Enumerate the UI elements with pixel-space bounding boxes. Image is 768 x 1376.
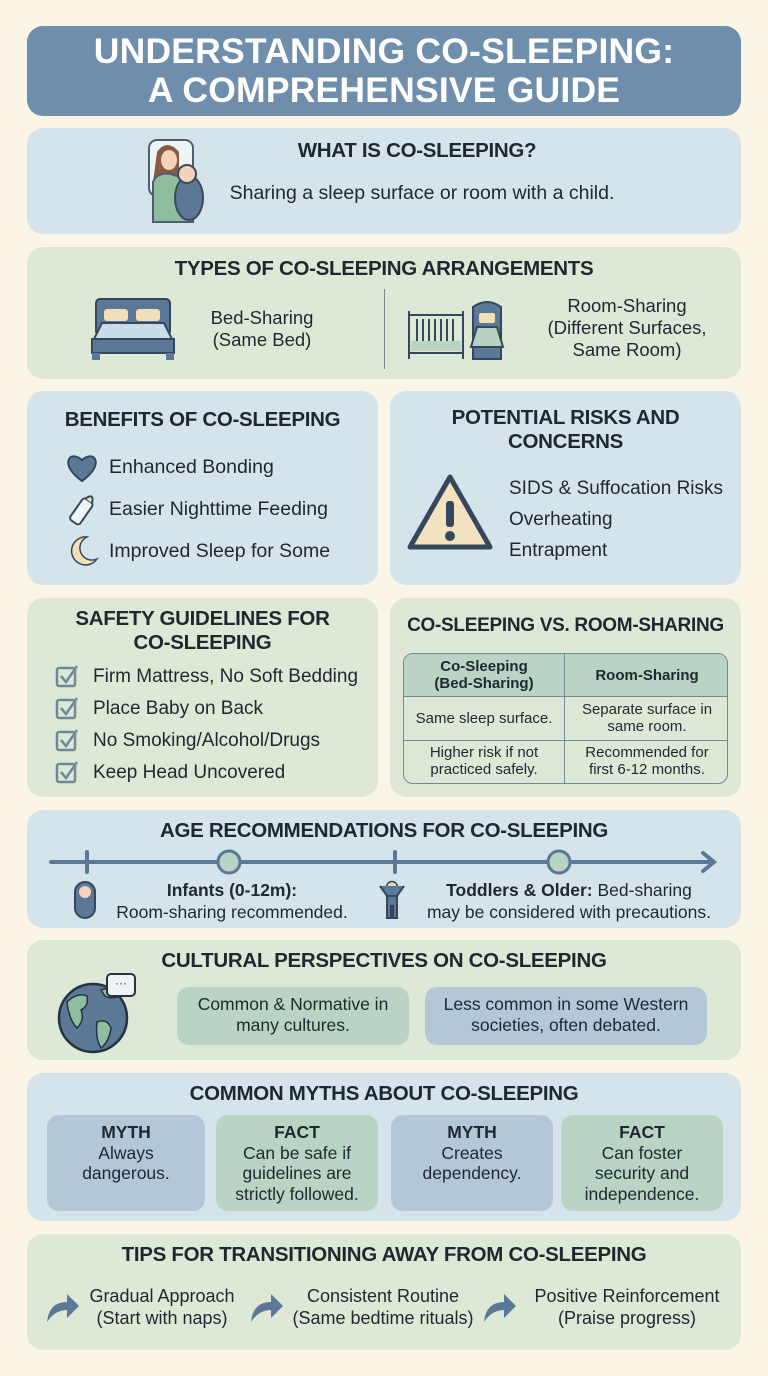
- fact card 1: Can be safe if: [243, 1142, 351, 1162]
- text: Entrapment: [509, 540, 607, 561]
- fact card 2: Can foster: [602, 1142, 682, 1162]
- panel: benefits: [27, 391, 378, 585]
- checklist: No Smoking/Alcohol/Drugs: [93, 730, 320, 751]
- heading: BENEFITS OF CO-SLEEPING: [65, 408, 340, 431]
- fact card 1: [216, 1115, 378, 1211]
- text: bed-sharing: (Same Bed): [213, 329, 311, 350]
- text: toddlers: Toddlers & Older: Bed-sharing: [446, 880, 692, 900]
- arrow icon 1: [47, 1294, 79, 1322]
- tip 3: [534, 1286, 720, 1328]
- text: room-sharing: Room-Sharing: [567, 295, 687, 316]
- table: Higher risk if not: [430, 744, 538, 761]
- text: room-sharing: (Different Surfaces,: [547, 317, 707, 338]
- panel: types: [27, 247, 741, 379]
- text: infants: Infants (0-12m):: [167, 880, 297, 900]
- table: first 6-12 months.: [589, 761, 705, 778]
- table: same room.: [607, 718, 687, 735]
- callout: less common: [425, 987, 707, 1045]
- icon: crib and bed: [408, 301, 504, 360]
- icon: toddler: [379, 880, 405, 919]
- icon: warning: [408, 474, 492, 550]
- heading: CO-SLEEPING VS. ROOM-SHARING: [407, 615, 724, 636]
- tip 3: Positive Reinforcement: [534, 1286, 720, 1306]
- icon: globe with speech bubble: [58, 973, 136, 1054]
- myth card 2: Creates: [441, 1142, 503, 1162]
- panel: safety: [27, 598, 378, 797]
- text: SIDS & Suffocation Risks: [509, 478, 723, 499]
- text: Enhanced Bonding: [109, 456, 274, 478]
- icon: heart: [67, 455, 97, 482]
- title: UNDERSTANDING CO-SLEEPING:: [94, 31, 674, 71]
- text: Sharing a sleep surface or room with a child.: [230, 182, 614, 204]
- tip 2: [292, 1286, 474, 1328]
- heading: CONCERNS: [508, 430, 623, 453]
- fact card 2: [561, 1115, 723, 1211]
- heading: POTENTIAL RISKS AND: [452, 406, 679, 429]
- fact card 1: guidelines are: [243, 1163, 351, 1183]
- checklist: Place Baby on Back: [93, 698, 263, 719]
- title: A COMPREHENSIVE GUIDE: [148, 70, 620, 110]
- text: room-sharing: Same Room): [572, 339, 681, 360]
- table: Separate surface in: [582, 701, 712, 718]
- fact card 1: strictly followed.: [235, 1184, 359, 1204]
- text: Improved Sleep for Some: [109, 540, 330, 562]
- panel: tips: [27, 1234, 741, 1350]
- heading: [452, 406, 679, 453]
- heading: AGE RECOMMENDATIONS FOR CO-SLEEPING: [160, 819, 608, 842]
- text: toddlers: [427, 880, 711, 922]
- fact card 1: FACT: [274, 1122, 320, 1142]
- icon: double bed: [91, 298, 175, 360]
- text: bed-sharing: Bed-Sharing: [211, 307, 313, 328]
- callout: common: many cultures.: [236, 1015, 350, 1035]
- table: [403, 653, 728, 784]
- heading: TYPES OF CO-SLEEPING ARRANGEMENTS: [175, 257, 593, 280]
- text: room-sharing: [547, 295, 707, 360]
- tip 1: Gradual Approach: [89, 1286, 235, 1306]
- callout: less common: societies, often debated.: [471, 1015, 661, 1035]
- icon: swaddled infant: [74, 881, 96, 919]
- checklist: Keep Head Uncovered: [93, 762, 285, 783]
- text: Easier Nighttime Feeding: [109, 498, 328, 520]
- title: [27, 26, 741, 116]
- tip 2: (Same bedtime rituals): [292, 1308, 474, 1328]
- tip 3: (Praise progress): [558, 1308, 696, 1328]
- text: toddlers: may be considered with precautions.: [427, 902, 711, 922]
- panel: comparison: [390, 598, 741, 797]
- table: Room-Sharing: [595, 667, 699, 684]
- heading: WHAT IS CO-SLEEPING?: [298, 139, 536, 162]
- myth card 1: MYTH: [101, 1122, 151, 1142]
- myth card 2: [391, 1115, 553, 1211]
- myth card 1: dangerous.: [82, 1163, 170, 1183]
- text: infants: Room-sharing recommended.: [116, 902, 348, 922]
- callout: less common: Less common in some Western: [444, 994, 688, 1014]
- table: (Bed-Sharing): [434, 675, 534, 692]
- myth card 2: dependency.: [423, 1163, 521, 1183]
- panel: cultural perspectives: [27, 940, 741, 1060]
- myth card 1: [47, 1115, 205, 1211]
- table: practiced safely.: [430, 761, 538, 778]
- panel: age recommendations: [27, 810, 741, 928]
- text: infants: [116, 880, 348, 922]
- text: Overheating: [509, 509, 613, 530]
- panel: what is co-sleeping: [27, 128, 741, 234]
- icon: moon: [70, 536, 100, 566]
- panel: myths: [27, 1073, 741, 1221]
- fact card 2: independence.: [585, 1184, 699, 1204]
- callout: common: Common & Normative in: [198, 994, 388, 1014]
- arrow icon 2: [251, 1294, 283, 1322]
- icon: bottle: [69, 495, 94, 526]
- text: [509, 478, 723, 561]
- tip 1: (Start with naps): [96, 1308, 228, 1328]
- fact card 2: FACT: [619, 1122, 665, 1142]
- text: bed-sharing: [211, 307, 313, 350]
- timeline arrow: [49, 850, 717, 874]
- table: Co-Sleeping: [440, 658, 528, 675]
- fact card 2: security and: [595, 1163, 689, 1183]
- icon: parent holding baby: [148, 139, 204, 223]
- callout: common: [177, 987, 409, 1045]
- heading: COMMON MYTHS ABOUT CO-SLEEPING: [190, 1082, 578, 1105]
- myth card 1: Always: [98, 1142, 154, 1162]
- panel: risks: [390, 391, 741, 585]
- heading: CO-SLEEPING: [134, 631, 271, 654]
- table: Same sleep surface.: [416, 710, 552, 727]
- tip 2: Consistent Routine: [307, 1286, 459, 1306]
- checklist: Firm Mattress, No Soft Bedding: [93, 666, 358, 687]
- heading: [75, 607, 330, 654]
- table: Recommended for: [585, 744, 709, 761]
- heading: SAFETY GUIDELINES FOR: [75, 607, 330, 630]
- heading: CULTURAL PERSPECTIVES ON CO-SLEEPING: [161, 949, 607, 972]
- myth card 2: MYTH: [447, 1122, 497, 1142]
- arrow icon 3: [484, 1294, 516, 1322]
- heading: TIPS FOR TRANSITIONING AWAY FROM CO-SLEEPING: [122, 1243, 646, 1266]
- icon: globe with speech bubble: ···: [115, 976, 127, 990]
- tip 1: [89, 1286, 235, 1328]
- checklist: [56, 665, 358, 784]
